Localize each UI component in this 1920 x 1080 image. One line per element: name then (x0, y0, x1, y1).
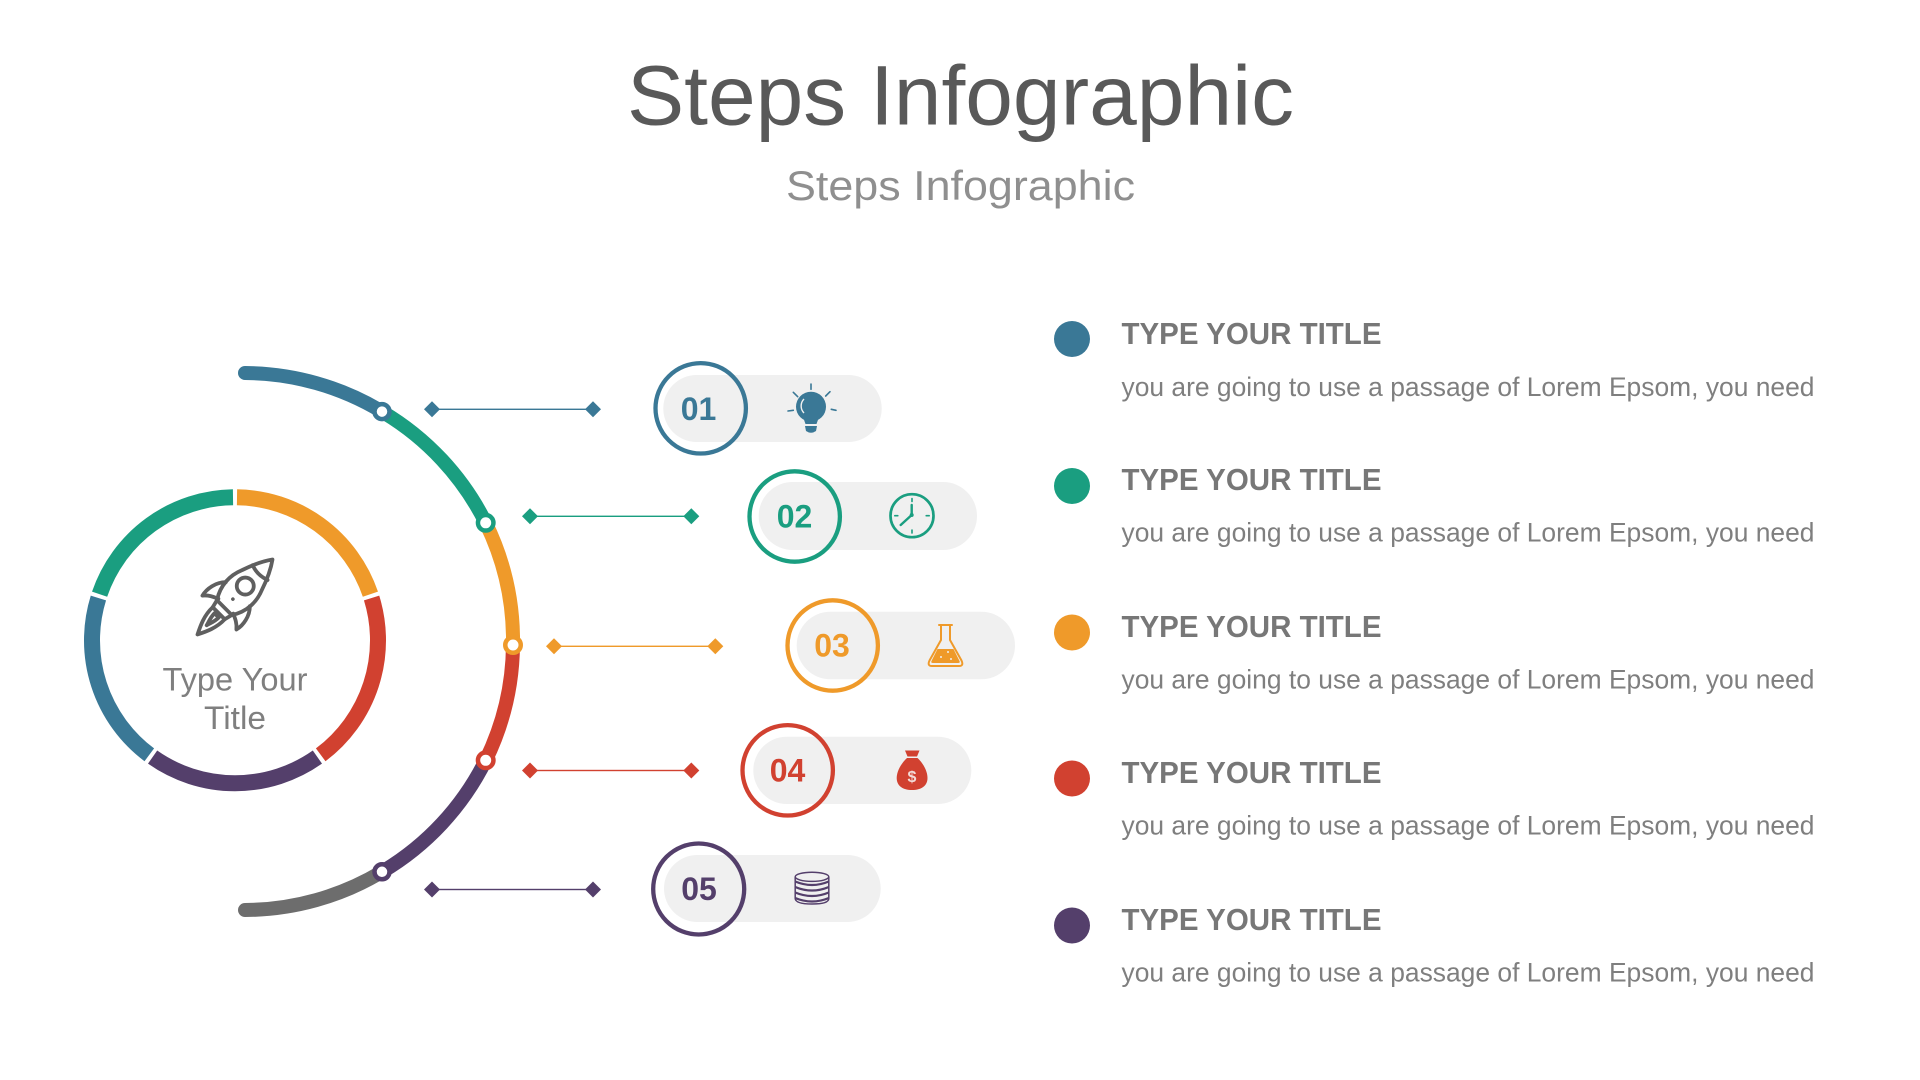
step 02 pill: 02 (777, 499, 812, 535)
list item 05: you are going to use a passage of Lorem Epsom, you need (1122, 958, 1814, 988)
list item 02: TYPE YOUR TITLE (1122, 463, 1382, 497)
list item 03: TYPE YOUR TITLE (1122, 610, 1382, 644)
step 05 pill: 05 (681, 871, 717, 907)
list item 02 (1054, 463, 1814, 548)
title: Steps Infographic (627, 48, 1294, 142)
step 02 pill (750, 471, 977, 562)
icon: coin stack (795, 872, 829, 904)
connector 02 (522, 508, 699, 524)
list item 05: TYPE YOUR TITLE (1122, 903, 1382, 937)
ring caption: Title (204, 700, 266, 736)
subtitle: Steps Infographic (786, 162, 1135, 209)
step 04 pill: 04 (770, 753, 806, 789)
connector 05 (424, 882, 601, 898)
central ring with five segments (92, 497, 378, 783)
list item 02: you are going to use a passage of Lorem Epsom, you need (1122, 518, 1814, 548)
list item 05 (1054, 903, 1814, 988)
icon: clock (890, 494, 934, 537)
connector 03 (546, 638, 723, 654)
connector 04 (522, 762, 699, 778)
step 01 pill: 01 (681, 391, 716, 427)
step 03 pill (788, 600, 1015, 691)
ring caption: Type Your (162, 662, 308, 698)
icon: flask (929, 625, 962, 666)
icon: rocket (180, 542, 290, 652)
list item 03 (1054, 610, 1814, 694)
list item 04: you are going to use a passage of Lorem Epsom, you need (1122, 810, 1814, 840)
list item 04: TYPE YOUR TITLE (1122, 756, 1382, 790)
list item 01: TYPE YOUR TITLE (1122, 317, 1382, 351)
step 01 pill (656, 363, 882, 453)
list item 04 (1054, 756, 1814, 840)
icon: light bulb (788, 384, 836, 433)
step 03 pill: 03 (814, 628, 850, 664)
step 05 pill (653, 844, 881, 934)
list item 01: you are going to use a passage of Lorem Epsom, you need (1122, 372, 1814, 402)
icon: money bag (897, 750, 928, 790)
arc node markers (374, 404, 521, 879)
outer arc with coloured segments (245, 373, 513, 910)
list item 01 (1054, 317, 1814, 402)
list item 03: you are going to use a passage of Lorem Epsom, you need (1122, 664, 1814, 694)
ring caption (162, 662, 308, 736)
connector 01 (424, 401, 601, 417)
icon: money bag: $ (908, 769, 917, 786)
step 04 pill (742, 725, 971, 816)
